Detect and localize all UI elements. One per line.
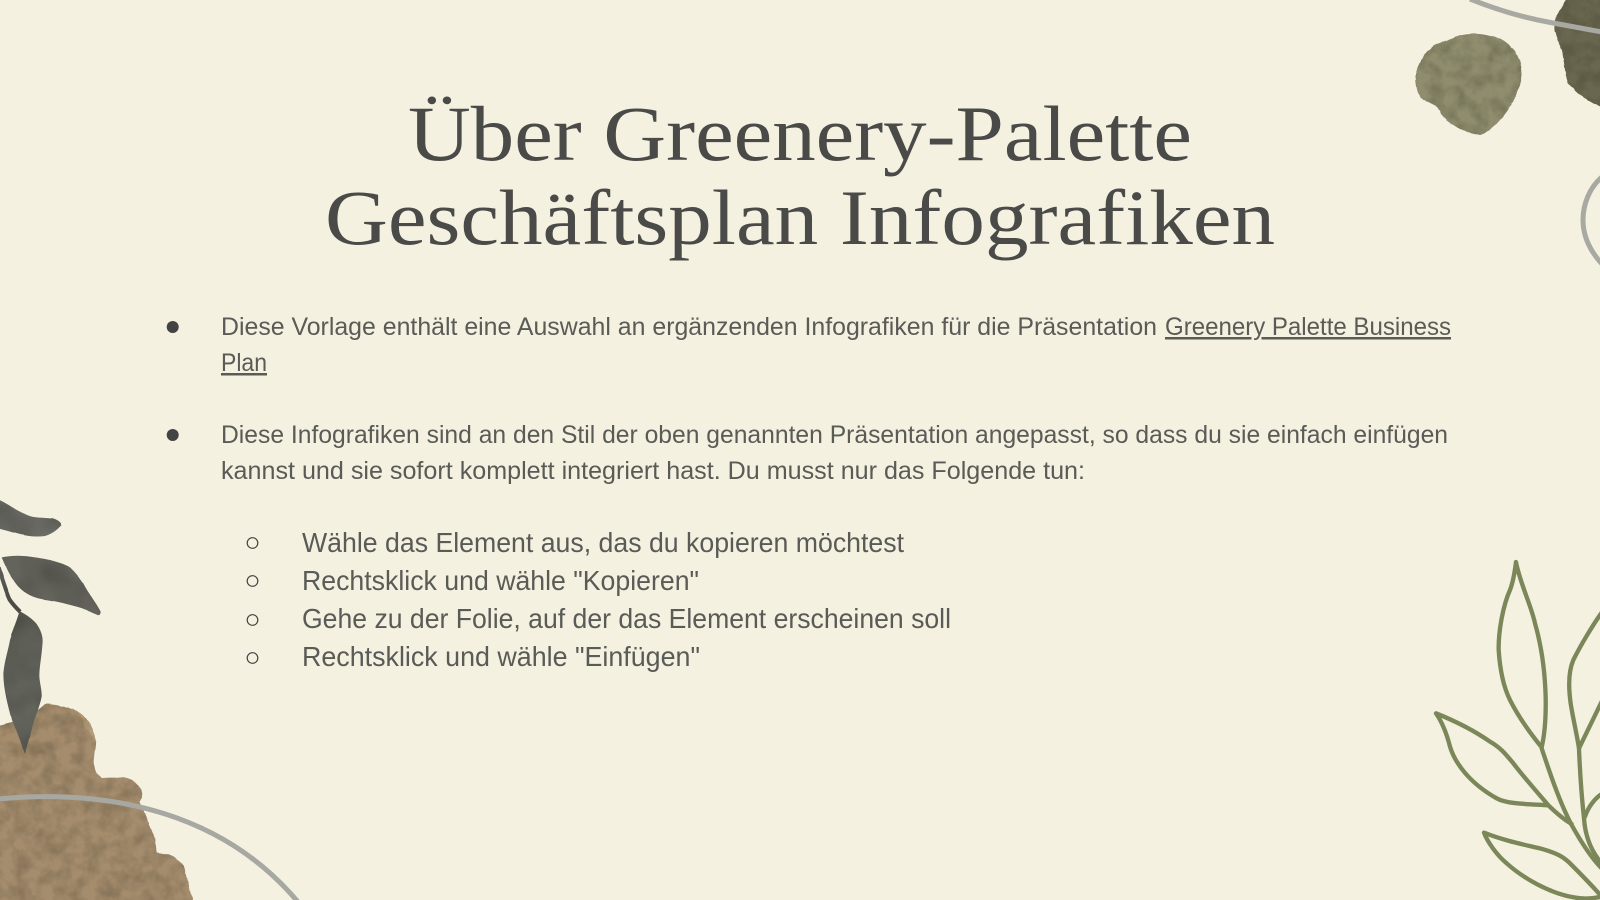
icon: dark watercolor leaves	[0, 499, 101, 754]
icon: green outline plant	[1436, 562, 1600, 899]
leaf bottom	[1484, 833, 1600, 899]
text block: sub list: Rechtsklick und wähle "Einfügen"	[302, 641, 700, 672]
leaf right upper	[1569, 613, 1600, 748]
text block: second bullet: kannst und sie sofort komplett integriert hast. Du musst nur das Folgende tun:	[221, 457, 1085, 485]
stems	[1542, 748, 1600, 868]
title: Über Greenery-Palette	[408, 90, 1192, 177]
leaf top	[1499, 562, 1546, 747]
text block: first bullet: Greenery Palette Business	[1165, 313, 1451, 341]
top right dark watercolor blob	[1554, 0, 1600, 108]
bottom left grey arc	[0, 797, 298, 900]
leaf one	[0, 499, 62, 537]
text block: first bullet: Plan	[221, 349, 267, 377]
text block: sub list: Gehe zu der Folie, auf der das Element erscheinen soll	[302, 603, 951, 634]
leaf three	[3, 612, 43, 754]
title: Geschäftsplan Infografiken	[325, 174, 1275, 261]
top right olive watercolor blob	[1416, 33, 1522, 135]
right grey arc	[1583, 177, 1600, 264]
leaf left	[1436, 713, 1548, 805]
text block: sub list: Wähle das Element aus, das du kopieren möchtest	[302, 527, 904, 558]
text block: first bullet: Diese Vorlage enthält eine Auswahl an ergänzenden Infografiken für die Präsentation	[221, 313, 1157, 341]
bottom left brown watercolor blob	[0, 704, 193, 900]
text block: second bullet	[167, 421, 1448, 485]
stem	[0, 567, 21, 612]
leaf two	[2, 556, 101, 615]
title	[325, 90, 1275, 261]
text block: first bullet	[167, 313, 1451, 377]
top right grey curve	[1470, 0, 1600, 32]
text block: sub list: Rechtsklick und wähle "Kopieren"	[302, 565, 699, 596]
text block: second bullet: Diese Infografiken sind an den Stil der oben genannten Präsentation angepasst, so dass du sie einfach einfügen	[221, 421, 1448, 449]
text block: sub list	[247, 527, 951, 672]
